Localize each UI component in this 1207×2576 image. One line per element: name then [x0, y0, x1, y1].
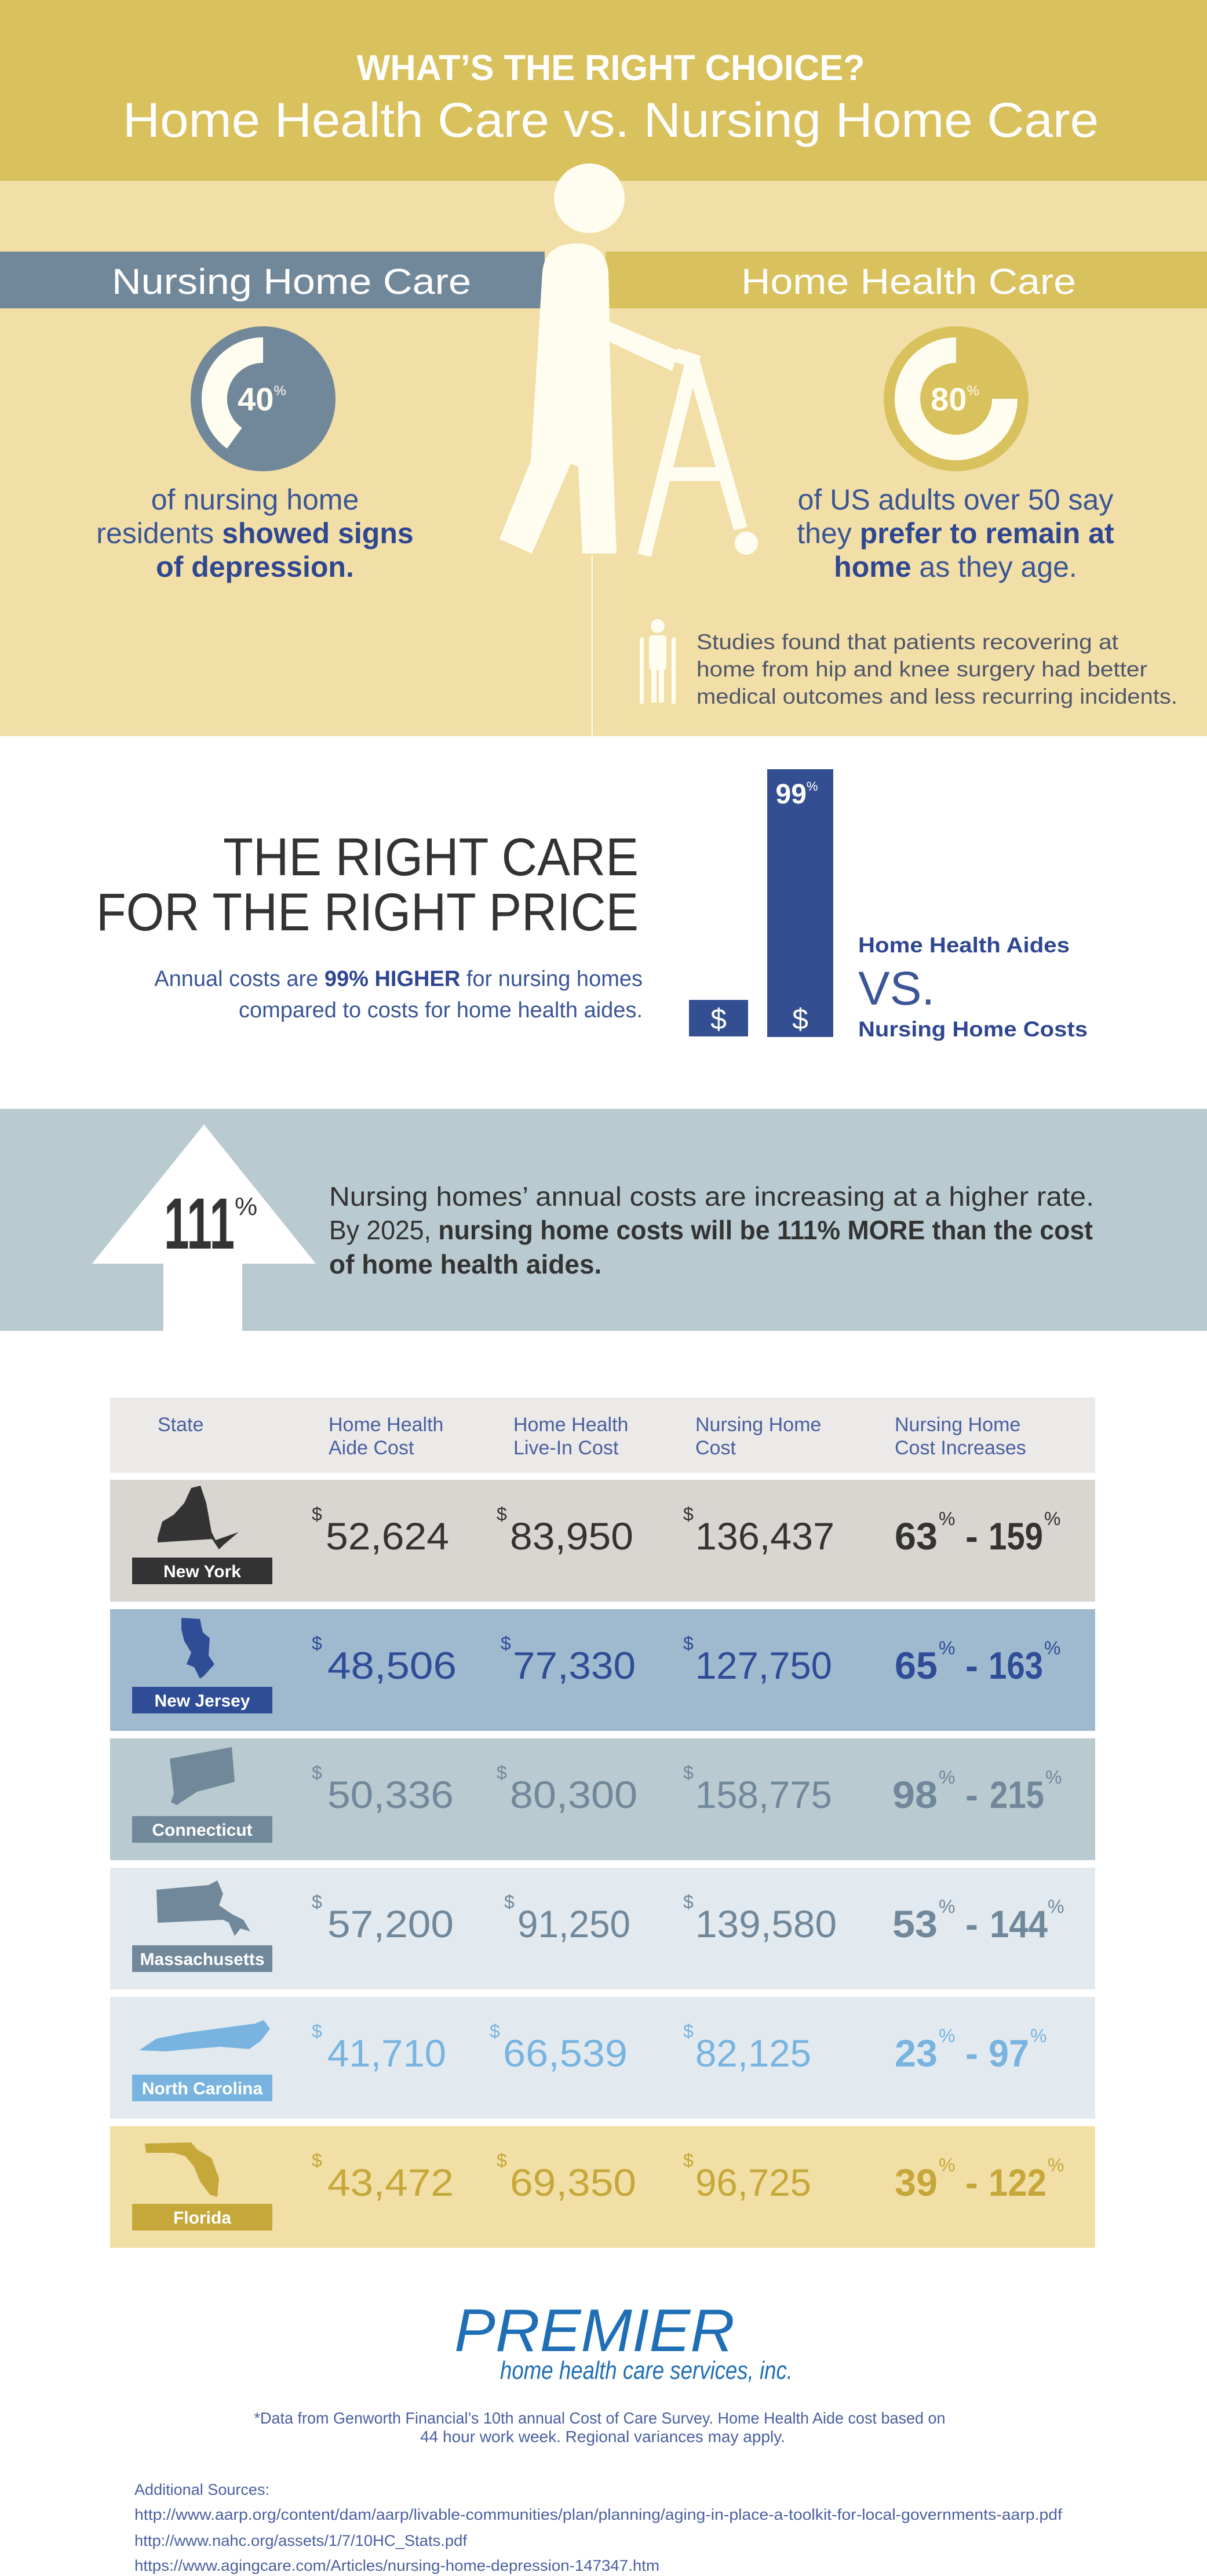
row: North Carolina: North Carolina	[142, 2079, 262, 2098]
donut 40%: %	[274, 383, 286, 399]
row: Florida: %	[939, 2155, 955, 2175]
sources: http://www.aarp.org/content/dam/aarp/livable-communities/plan/planning/aging-in-place-a-toolkit-for-local-governments-aarp.pdf	[134, 2506, 1063, 2523]
text: depression stat	[96, 483, 414, 583]
row: New Jersey: $	[501, 1633, 511, 1654]
row: Massachusetts: 91,250	[517, 1902, 630, 1945]
row: Connecticut: -	[965, 1773, 978, 1816]
row: Massachusetts: $	[504, 1891, 515, 1912]
table header	[110, 1398, 1095, 1473]
table header: Home Health	[513, 1414, 628, 1436]
text: 2025 projection	[329, 1181, 1094, 1279]
text: depression stat: of nursing home	[151, 483, 359, 516]
logo: home health care services, inc.	[500, 2356, 793, 2385]
figure with walker	[499, 163, 758, 736]
row: Florida: 69,350	[510, 2161, 636, 2204]
table header: Home Health	[329, 1414, 443, 1436]
text: 2025 projection: By 2025, nursing home costs will be 111% MORE than the cost	[329, 1215, 1093, 1245]
text: 2025 projection: Nursing homes’ annual costs are increasing at a higher rate.	[329, 1181, 1094, 1211]
text: prefer home stat: of US adults over 50 say	[798, 483, 1113, 516]
row: New York: 83,950	[510, 1515, 633, 1558]
row: Florida: %	[1048, 2155, 1064, 2175]
text: studies: medical outcomes and less recurring incidents.	[697, 685, 1177, 708]
bar chart: 99	[776, 779, 807, 810]
row: Connecticut: 215	[990, 1773, 1044, 1816]
row: Connecticut	[110, 1738, 1095, 1860]
row: Florida: $	[683, 2150, 694, 2171]
footnote: *Data from Genworth Financial’s 10th annual Cost of Care Survey. Home Health Aide cost based on	[254, 2409, 946, 2427]
table header: Nursing Home	[695, 1414, 821, 1436]
text: studies: Studies found that patients recovering at	[697, 630, 1119, 654]
row: Connecticut: %	[1045, 1767, 1062, 1788]
row: New York: 159	[989, 1515, 1043, 1558]
donut 80%: 80	[931, 381, 967, 417]
sources: Additional Sources:	[134, 2481, 269, 2498]
row: Massachusetts: $	[683, 1891, 694, 1912]
arrow	[92, 1125, 316, 1331]
row: North Carolina: $	[683, 2021, 694, 2042]
title: WHAT’S THE RIGHT CHOICE?	[357, 48, 865, 88]
row: New York: -	[965, 1515, 978, 1558]
row: New Jersey: 127,750	[695, 1644, 832, 1687]
row: Massachusetts: %	[939, 1896, 955, 1917]
row: New York: 136,437	[695, 1515, 834, 1558]
donut 80%	[884, 326, 1029, 471]
row: North Carolina: 23	[895, 2032, 938, 2075]
111%: 111	[164, 1184, 235, 1264]
panel: right care right price	[96, 769, 1088, 1041]
sources: http://www.nahc.org/assets/1/7/10HC_Stats.pdf	[134, 2532, 467, 2549]
table header: Nursing Home	[895, 1414, 1020, 1436]
row: Florida: $	[312, 2150, 322, 2171]
row: North Carolina: $	[490, 2021, 500, 2042]
text: prefer home stat: home as they age.	[834, 551, 1077, 583]
row: Florida: 122	[989, 2161, 1046, 2204]
table header: Live-In Cost	[513, 1437, 619, 1459]
row: New Jersey: $	[683, 1633, 694, 1654]
row: New Jersey: -	[965, 1644, 978, 1687]
bar chart: $	[792, 1003, 808, 1035]
text: prefer home stat	[797, 483, 1114, 583]
text: 99% higher: Annual costs are 99% HIGHER for nursing homes	[154, 967, 643, 991]
row: New Jersey: 77,330	[513, 1644, 636, 1687]
bar: nursing home care	[0, 252, 545, 308]
text: studies: home from hip and knee surgery had better	[697, 657, 1147, 681]
heading	[96, 828, 639, 942]
table header: Cost Increases	[895, 1437, 1026, 1459]
logo	[454, 2297, 793, 2385]
icon: NY map	[158, 1486, 239, 1549]
logo: PREMIER	[454, 2297, 735, 2364]
header band	[0, 0, 1207, 181]
bar chart: $	[710, 1003, 727, 1035]
heading: THE RIGHT CARE	[223, 828, 639, 887]
bar: home health care: Home Health Care	[741, 262, 1076, 302]
panel: comparison	[0, 163, 1207, 736]
row: Massachusetts: 57,200	[327, 1902, 454, 1945]
donut 40%	[191, 326, 336, 471]
row: New York: New York	[163, 1562, 241, 1581]
row: Massachusetts: Massachusetts	[140, 1950, 265, 1969]
row: Massachusetts: %	[1048, 1896, 1064, 1917]
icon: NC map	[139, 2020, 270, 2051]
legend labels: Home Health Aides	[858, 933, 1070, 957]
icon: NJ map	[181, 1618, 214, 1679]
row: Florida: 43,472	[327, 2161, 454, 2204]
row: Connecticut: 98	[892, 1773, 938, 1816]
row: Connecticut: $	[312, 1762, 322, 1783]
text: depression stat: of depression.	[156, 551, 354, 583]
row: New Jersey: 65	[895, 1644, 938, 1687]
row: New Jersey: 48,506	[327, 1644, 457, 1687]
row: North Carolina: 66,539	[503, 2032, 628, 2075]
row: North Carolina: 97	[989, 2032, 1029, 2075]
row: Massachusetts: 144	[990, 1902, 1048, 1945]
row: New Jersey: %	[1044, 1638, 1060, 1658]
row: Massachusetts: -	[965, 1902, 978, 1945]
table header: State	[158, 1414, 203, 1436]
sources: https://www.agingcare.com/Articles/nursing-home-depression-147347.htm	[134, 2557, 659, 2574]
row: North Carolina: -	[965, 2032, 978, 2075]
row: New York: 52,624	[326, 1515, 449, 1558]
row: Massachusetts: 53	[892, 1902, 938, 1945]
row: Florida	[110, 2126, 1095, 2248]
row: New Jersey: %	[939, 1638, 955, 1658]
table header: Aide Cost	[329, 1437, 414, 1459]
icon: FL map	[145, 2142, 219, 2197]
footnote	[254, 2409, 946, 2446]
row: Massachusetts: $	[312, 1891, 322, 1912]
row: New York: %	[1044, 1508, 1060, 1529]
row: North Carolina: 41,710	[327, 2032, 446, 2075]
row: New York: %	[939, 1508, 955, 1529]
row: Connecticut: Connecticut	[152, 1821, 253, 1840]
text: 2025 projection: of home health aides.	[329, 1249, 601, 1279]
text: 99% higher: compared to costs for home health aides.	[239, 998, 643, 1023]
bar chart: %	[807, 779, 818, 794]
footnote: 44 hour work week. Regional variances may apply.	[420, 2428, 785, 2446]
row: New York: 63	[895, 1515, 938, 1558]
111%: %	[235, 1192, 257, 1221]
row: North Carolina: 82,125	[695, 2032, 811, 2075]
row: Connecticut: %	[939, 1767, 955, 1788]
sources	[134, 2481, 1063, 2574]
row: Connecticut: $	[497, 1762, 507, 1783]
text: studies	[697, 630, 1177, 708]
row: Connecticut: 158,775	[695, 1773, 832, 1816]
icon: MA map	[156, 1880, 250, 1936]
row: New Jersey	[110, 1609, 1095, 1731]
panel: 111% increase	[0, 1109, 1207, 1331]
heading: FOR THE RIGHT PRICE	[96, 883, 639, 942]
row: Florida: Florida	[173, 2208, 231, 2228]
bar: nursing home care: Nursing Home Care	[112, 262, 471, 302]
text: prefer home stat: they prefer to remain at	[797, 517, 1114, 550]
row: New York: $	[312, 1504, 322, 1525]
bar: home health care	[606, 252, 1207, 308]
row: New York: $	[497, 1504, 507, 1525]
row: North Carolina: %	[1030, 2025, 1046, 2046]
text: depression stat: residents showed signs	[96, 517, 414, 550]
row: New Jersey: $	[312, 1633, 322, 1654]
row: Connecticut: 50,336	[327, 1773, 454, 1816]
row: New Jersey: 163	[989, 1644, 1043, 1687]
legend labels	[858, 933, 1088, 1041]
text: 99% higher	[154, 967, 643, 1023]
donut 80%: %	[967, 383, 979, 399]
table header: Cost	[695, 1437, 736, 1459]
row: Connecticut: 80,300	[510, 1773, 637, 1816]
row: Massachusetts	[110, 1868, 1095, 1989]
row: New York: $	[683, 1504, 694, 1525]
donut 40%: 40	[238, 381, 274, 417]
bar chart	[689, 769, 833, 1037]
row: Florida: 39	[895, 2161, 938, 2204]
row: Florida: 96,725	[695, 2161, 811, 2204]
icon: CT map	[170, 1747, 235, 1805]
row: Florida: $	[497, 2150, 507, 2171]
row: North Carolina	[110, 1997, 1095, 2119]
row: New York	[110, 1480, 1095, 1602]
row: North Carolina: $	[312, 2021, 322, 2042]
legend labels: Nursing Home Costs	[858, 1017, 1088, 1041]
row: Florida: -	[965, 2161, 978, 2204]
icon: patient with crutches	[640, 619, 676, 704]
row: Massachusetts: 139,580	[695, 1902, 837, 1945]
legend labels: VS.	[858, 962, 935, 1015]
row: North Carolina: %	[939, 2025, 955, 2046]
subtitle: Home Health Care vs. Nursing Home Care	[123, 93, 1099, 147]
row: New Jersey: New Jersey	[154, 1691, 250, 1711]
row: Connecticut: $	[683, 1762, 694, 1783]
